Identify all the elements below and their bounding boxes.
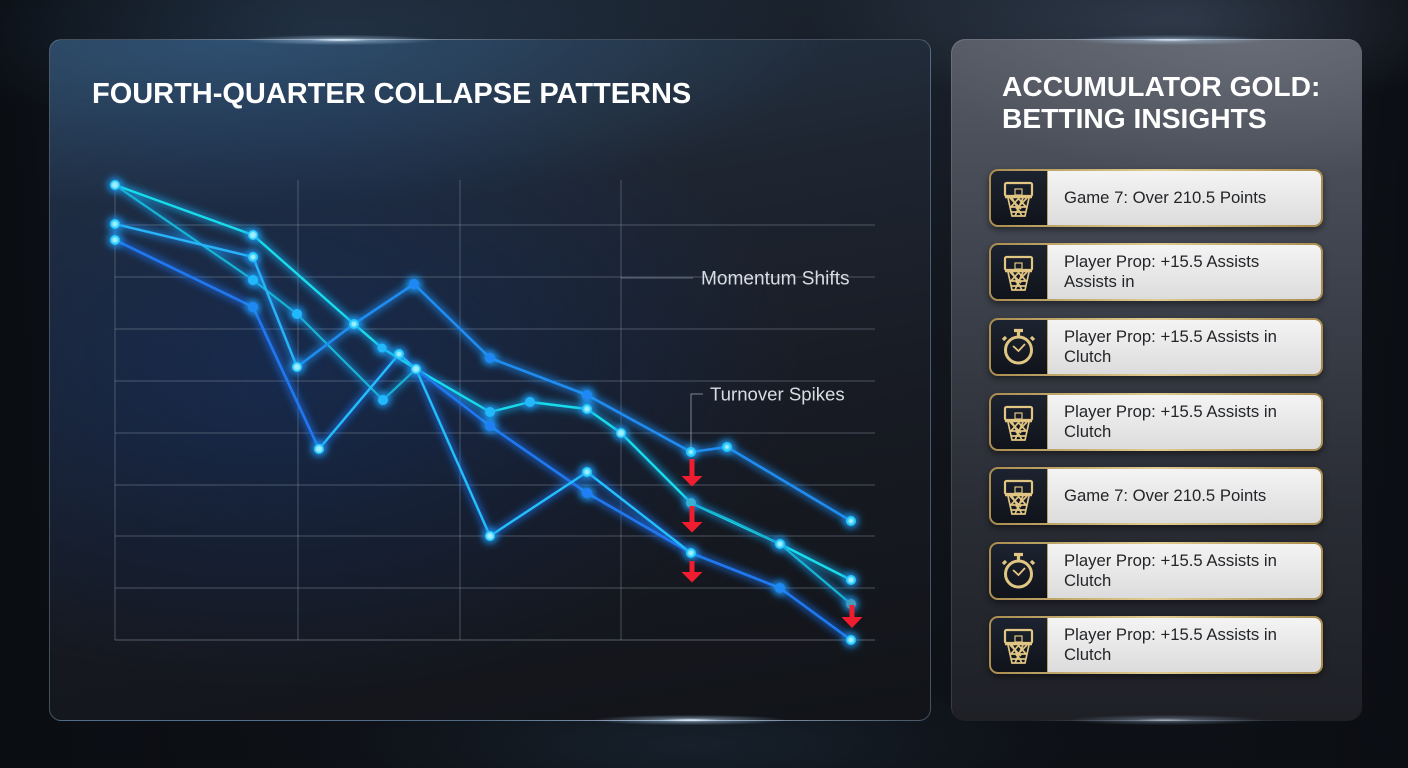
series: sky blue (319, 354, 691, 553)
card text: Player Prop: +15.5 Assists in (1064, 551, 1277, 570)
series: teal (115, 185, 851, 604)
label: Turnover Spikes: Turnover Spikes (710, 384, 845, 404)
card 5 (989, 467, 1323, 525)
card text: Game 7: Over 210.5 Points (1064, 486, 1266, 505)
icon: stopwatch (991, 320, 1047, 374)
line chart (102, 172, 875, 653)
card text: Clutch (1064, 571, 1111, 590)
card 1 (989, 169, 1323, 227)
icon: basketball hoop (991, 395, 1047, 449)
card text (1048, 245, 1321, 299)
card text: Clutch (1064, 422, 1111, 441)
card 4 (989, 393, 1323, 451)
icon: basketball hoop (991, 171, 1047, 225)
card text: Player Prop: +15.5 Assists in (1064, 402, 1277, 421)
card text (1048, 320, 1321, 374)
insights heading: BETTING INSIGHTS (1002, 102, 1267, 134)
label: Momentum Shifts: Momentum Shifts (701, 268, 850, 290)
icon: basketball hoop (991, 245, 1047, 299)
card text (1048, 544, 1321, 598)
series: mid blue (297, 284, 851, 521)
card text (1048, 171, 1321, 225)
card 3 (989, 318, 1323, 376)
insights heading: ACCUMULATOR GOLD: (1002, 70, 1320, 102)
series glow (115, 185, 851, 640)
series: bright cyan (115, 185, 851, 580)
panel: chart (49, 39, 931, 721)
card 7 (989, 616, 1323, 674)
data points (108, 178, 858, 647)
card 2 (989, 243, 1323, 301)
icon: basketball hoop (991, 618, 1047, 672)
card text: Clutch (1064, 645, 1111, 664)
icon: basketball hoop (991, 469, 1047, 523)
label: Turnover Spikes (691, 384, 845, 448)
series: light blue (115, 224, 297, 367)
red arrows (682, 459, 862, 628)
panel: betting insights (951, 39, 1362, 721)
card text (1048, 395, 1321, 449)
series: royal blue (115, 240, 851, 640)
chart heading: FOURTH-QUARTER COLLAPSE PATTERNS (92, 78, 691, 110)
card text: Clutch (1064, 347, 1111, 366)
icon: stopwatch (991, 544, 1047, 598)
insights heading (1002, 70, 1320, 134)
card text: Player Prop: +15.5 Assists (1064, 252, 1259, 271)
card text (1048, 469, 1321, 523)
card text: Player Prop: +15.5 Assists in (1064, 625, 1277, 644)
card text (1048, 618, 1321, 672)
card text: Assists in (1064, 272, 1134, 291)
card text: Player Prop: +15.5 Assists in (1064, 327, 1277, 346)
card 6 (989, 542, 1323, 600)
card text: Game 7: Over 210.5 Points (1064, 188, 1266, 207)
